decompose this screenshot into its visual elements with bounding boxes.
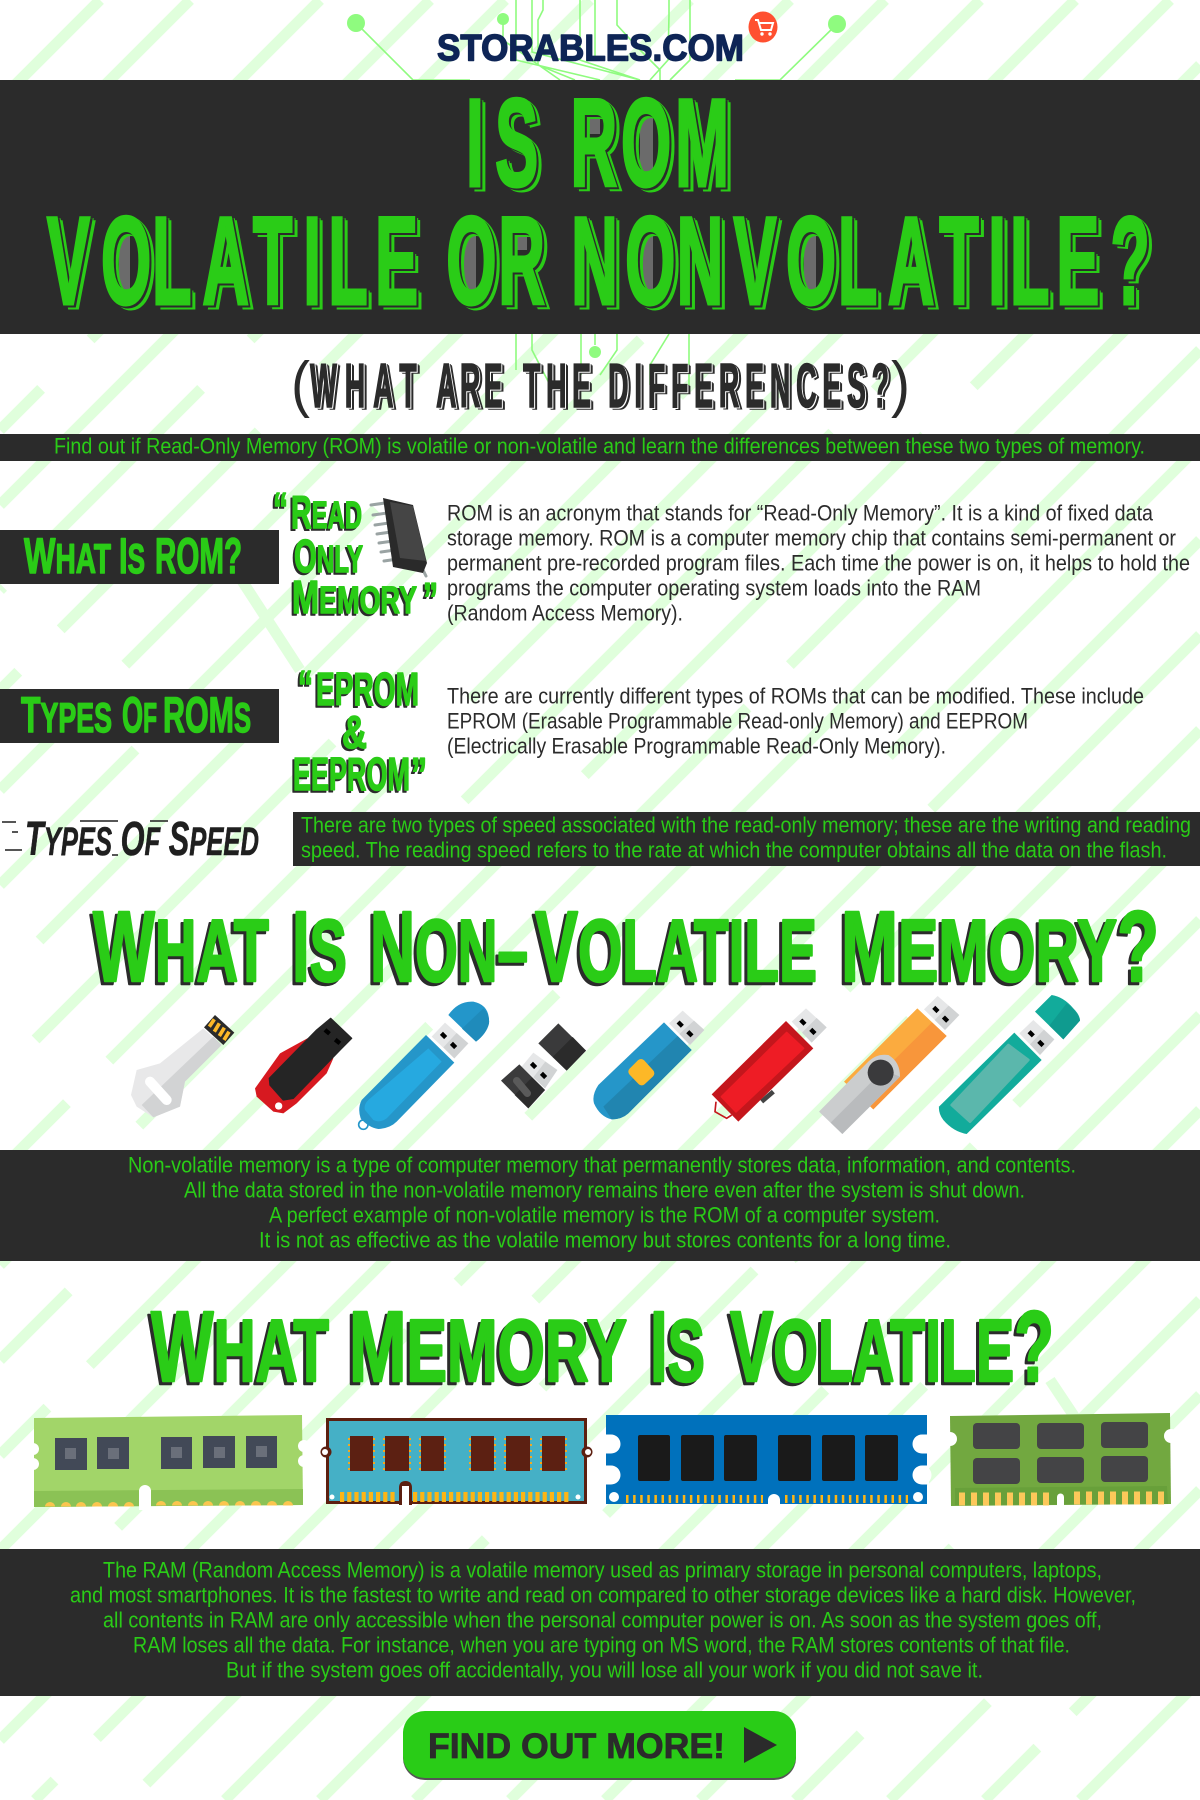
RAM description: [0, 1549, 1200, 1696]
icon: play arrow: [744, 1727, 777, 1763]
non-volatile memory description: [0, 1150, 1200, 1261]
icon: orange swivel USB: [819, 996, 959, 1134]
EPROM and EEPROM callout: &: [342, 706, 367, 758]
title line 1: IS: [466, 74, 538, 214]
section: types of speed label: TYPES OF SPEED: [25, 813, 259, 866]
EPROM and EEPROM callout: ”: [411, 748, 427, 800]
non-volatile memory description: A perfect example of non-volatile memory is the ROM of a computer system.: [269, 1202, 940, 1228]
icon: teal and brown RAM stick: [320, 1418, 592, 1505]
section: what is ROM label: [0, 528, 279, 584]
icon: cart badge: [748, 12, 778, 42]
section: what is ROM label: WHAT: [24, 528, 111, 584]
title line 2: [47, 192, 1150, 332]
heading: what memory is volatile: IS: [650, 1291, 705, 1403]
RAM description: But if the system goes off accidentally, you will lose all your work if you did not save it.: [226, 1658, 983, 1682]
RAM description: all contents in RAM are only accessible when the personal computer power is on. As soon as the system goes off,: [103, 1608, 1102, 1632]
icon: olive green RAM stick: [943, 1413, 1178, 1507]
subtitle: THE: [523, 352, 591, 421]
section: types of ROMs label: OF: [122, 687, 157, 743]
types of ROMs description: There are currently different types of ROMs that can be modified. These include: [447, 684, 1144, 708]
section: types of ROMs label: ROMS: [163, 687, 251, 743]
icon: red USB: [712, 1008, 827, 1122]
heading: what memory is volatile: MEMORY: [349, 1291, 627, 1403]
RAM modules row: [27, 1413, 1178, 1510]
heading: what memory is volatile: WHAT: [151, 1291, 329, 1403]
RAM description: RAM loses all the data. For instance, when you are typing on MS word, the RAM stores contents of that file.: [133, 1632, 1070, 1658]
EPROM and EEPROM callout: EPROM: [316, 663, 419, 715]
heading: what memory is volatile: [151, 1291, 1054, 1403]
section: types of ROMs label: [0, 687, 279, 743]
title line 2: VOLATILE: [47, 192, 418, 332]
types of ROMs description: [447, 684, 1144, 758]
heading: what is non-volatile memory: NON–: [370, 891, 528, 1003]
call to action button: [403, 1711, 796, 1780]
heading: what is non-volatile memory: VOLATILE: [535, 891, 817, 1003]
subtitle: [291, 350, 910, 421]
subtitle: ): [891, 350, 910, 419]
logo wordmark: STORABLES.COM: [437, 28, 744, 68]
title background: [0, 80, 1200, 334]
circuit traces: [347, 0, 846, 390]
ROM description: (Random Access Memory).: [447, 600, 683, 626]
read only memory callout: ONLY: [294, 530, 363, 582]
icon: light green RAM stick: [27, 1415, 310, 1510]
EPROM and EEPROM callout: [293, 661, 427, 800]
subtitle: ARE: [436, 352, 503, 421]
heading: what is non-volatile memory: [93, 891, 1159, 1003]
icon: memory chip: [371, 498, 427, 576]
subtitle: WHAT: [310, 352, 417, 421]
read only memory callout: [273, 483, 438, 625]
read only memory callout: ”: [423, 573, 438, 625]
ROM description: programs the computer operating system loads into the RAM: [447, 576, 981, 600]
title band: [0, 74, 1200, 334]
title line 2: NONVOLATILE?: [571, 192, 1150, 332]
heading: what is non-volatile memory: IS: [292, 891, 347, 1003]
non-volatile memory description: Non-volatile memory is a type of computer memory that permanently stores data, information, and contents.: [128, 1152, 1076, 1178]
icon: blue USB with cap: [359, 1002, 489, 1129]
EPROM and EEPROM callout: EEPROM: [293, 748, 410, 800]
icon: black mini USB: [501, 1023, 586, 1108]
heading: what memory is volatile: VOLATILE?: [730, 1291, 1054, 1403]
section: what is ROM label: ROM?: [155, 528, 242, 584]
title line 1: ROM: [570, 74, 729, 214]
icon: blue USB with yellow button: [593, 1011, 704, 1119]
section: what is ROM label: IS: [119, 528, 145, 584]
EPROM and EEPROM callout: “: [298, 661, 313, 713]
read only memory callout: “: [273, 483, 288, 535]
section: types of ROMs label: TYPES: [21, 687, 112, 743]
ROM description: [447, 500, 1190, 626]
types of ROMs description: EPROM (Erasable Programmable Read-only Memory) and EEPROM: [447, 708, 1028, 734]
subtitle: (: [291, 350, 310, 419]
RAM description: The RAM (Random Access Memory) is a volatile memory used as primary storage in personal computers, laptops,: [103, 1558, 1102, 1582]
counter hatching: [119, 102, 816, 295]
non-volatile memory description: It is not as effective as the volatile memory but stores contents for a long time.: [259, 1228, 951, 1252]
USB drives row: [131, 995, 1080, 1134]
logo: [437, 12, 778, 68]
non-volatile memory description: All the data stored in the non-volatile memory remains there even after the system is shut down.: [184, 1178, 1025, 1202]
button label: FIND OUT MORE!: [428, 1727, 725, 1766]
types of ROMs description: (Electrically Erasable Programmable Read-Only Memory).: [447, 734, 946, 758]
icon: teal USB with cap: [939, 995, 1080, 1134]
icon: black and red USB: [255, 1018, 352, 1113]
subtitle: DIFFERENCES?: [608, 352, 889, 421]
types of speed description: [293, 812, 1200, 866]
title line 2: OR: [446, 192, 545, 332]
title line 1: [466, 74, 729, 214]
icon: blue RAM stick: [602, 1415, 932, 1506]
icon: white key USB: [131, 1015, 234, 1117]
read only memory callout: MEMORY: [292, 571, 417, 623]
read only memory callout: READ: [291, 486, 362, 538]
heading: what is non-volatile memory: WHAT: [93, 891, 269, 1003]
